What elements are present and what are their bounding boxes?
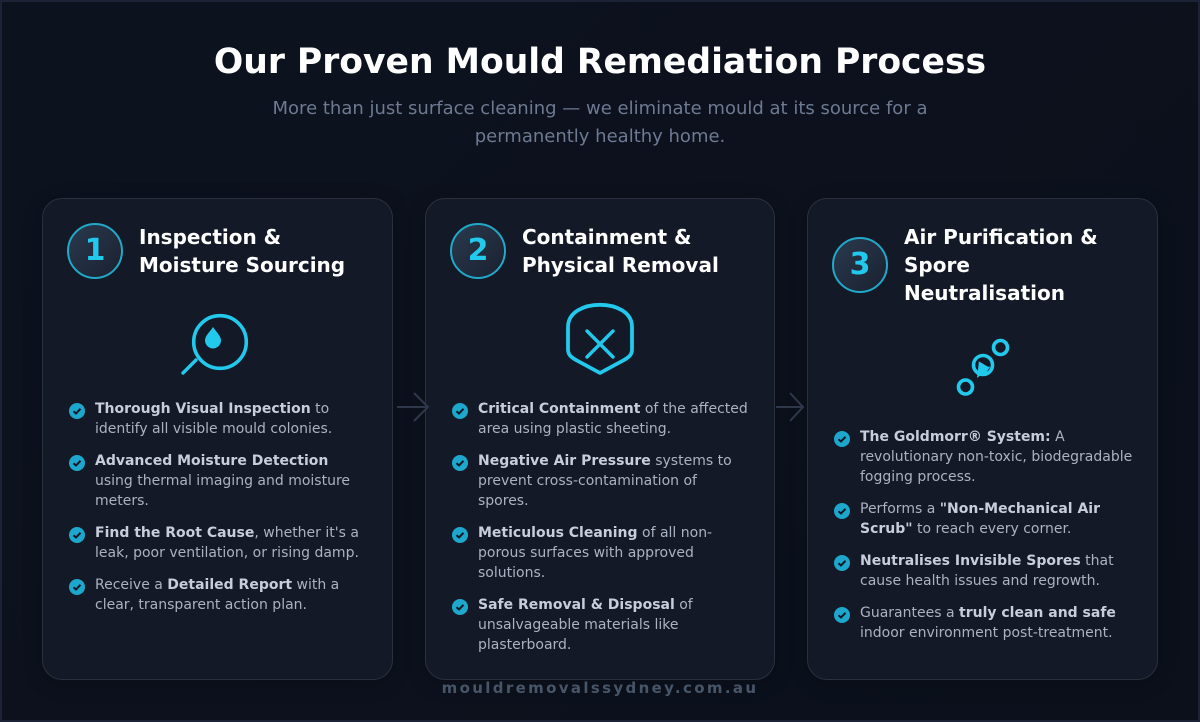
bullet text [95, 453, 350, 509]
list item [69, 403, 85, 419]
heading: step 1: Moisture Sourcing [139, 253, 345, 277]
heading: step 1: Inspection & [139, 225, 281, 249]
subtitle: More than just surface cleaning — we eliminate mould at its source for a [273, 98, 927, 119]
bullet text: Critical Containment of the affected [478, 401, 748, 417]
list item [452, 403, 468, 419]
arrow: step 2 to 3 [776, 392, 804, 422]
bullet text [95, 525, 359, 561]
heading: step 2: Physical Removal [522, 253, 719, 277]
list item [834, 555, 850, 571]
step number 1 [67, 223, 123, 279]
icon: spores and purifier [956, 338, 1010, 396]
bullet text: Meticulous Cleaning of all non- [478, 525, 712, 541]
list item [69, 455, 85, 471]
bullet text: Advanced Moisture Detection [95, 453, 328, 469]
bullet text: Neutralises Invisible Spores that [860, 553, 1114, 569]
bullet text: prevent cross-contamination of [478, 473, 697, 489]
title: Our Proven Mould Remediation Process [214, 42, 986, 82]
list item [452, 455, 468, 471]
bullet text: Scrub" to reach every corner. [860, 521, 1071, 537]
arrow: step 1 to 2 [397, 392, 430, 422]
bullet text: Negative Air Pressure systems to [478, 453, 732, 469]
list item [69, 527, 85, 543]
heading: step 3: Air Purification & [904, 225, 1098, 249]
bullet text: identify all visible mould colonies. [95, 421, 332, 437]
list item [834, 503, 850, 519]
subtitle: permanently healthy home. [475, 126, 725, 147]
bullet text [95, 577, 339, 613]
bullet text [860, 605, 1116, 641]
list item [452, 527, 468, 543]
bullet text [860, 501, 1100, 537]
bullet text: using thermal imaging and moisture [95, 473, 350, 489]
bullet text: Receive a Detailed Report with a [95, 577, 339, 593]
bullet text: meters. [95, 493, 149, 509]
heading: step 1 [139, 225, 345, 277]
list item [834, 607, 850, 623]
subtitle [273, 98, 927, 147]
panel: step 1 [42, 198, 393, 680]
bullet text: unsalvageable materials like [478, 617, 678, 633]
icon: shield with cross [566, 302, 634, 375]
panel: step 2 [425, 198, 775, 680]
panel: step 3 [807, 198, 1158, 680]
bullet text [95, 401, 332, 437]
bullet text [860, 553, 1114, 589]
heading: step 2 [522, 225, 719, 277]
bullet text: spores. [478, 493, 529, 509]
icon: magnifier with water drop [181, 314, 248, 375]
bullet text: plasterboard. [478, 637, 571, 653]
bullet text: cause health issues and regrowth. [860, 573, 1100, 589]
heading: step 2: Containment & [522, 225, 691, 249]
step number 2: 2 [468, 233, 488, 268]
bullet text: Safe Removal & Disposal of [478, 597, 693, 613]
bullet text [478, 525, 712, 581]
bullet text: Guarantees a truly clean and safe [860, 605, 1116, 621]
bullet text: Performs a "Non-Mechanical Air [860, 501, 1100, 517]
bullet text [478, 453, 732, 509]
bullet text: The Goldmorr® System: A [860, 429, 1065, 445]
step number 3: 3 [850, 247, 870, 282]
list item [834, 431, 850, 447]
bullet text: area using plastic sheeting. [478, 421, 671, 437]
bullet text: fogging process. [860, 469, 976, 485]
bullet text: solutions. [478, 565, 545, 581]
bullet text [478, 401, 748, 437]
heading: step 3: Spore [904, 253, 970, 277]
step number 1: 1 [85, 233, 105, 268]
bullet text [478, 597, 693, 653]
bullet text: leak, poor ventilation, or rising damp. [95, 545, 359, 561]
bullet text: porous surfaces with approved [478, 545, 694, 561]
bullet text: Thorough Visual Inspection to [95, 401, 329, 417]
step number 2 [450, 223, 506, 279]
list item [452, 599, 468, 615]
bullet text: Find the Root Cause, whether it's a [95, 525, 359, 541]
bullet text: indoor environment post-treatment. [860, 625, 1113, 641]
list item [69, 579, 85, 595]
footer website: mouldremovalssydney.com.au [442, 679, 758, 697]
step number 3 [832, 237, 888, 293]
bullet text: clear, transparent action plan. [95, 597, 307, 613]
bullet text: revolutionary non-toxic, biodegradable [860, 449, 1132, 465]
bullet text [860, 429, 1132, 485]
heading: step 3 [904, 225, 1098, 305]
heading: step 3: Neutralisation [904, 281, 1065, 305]
